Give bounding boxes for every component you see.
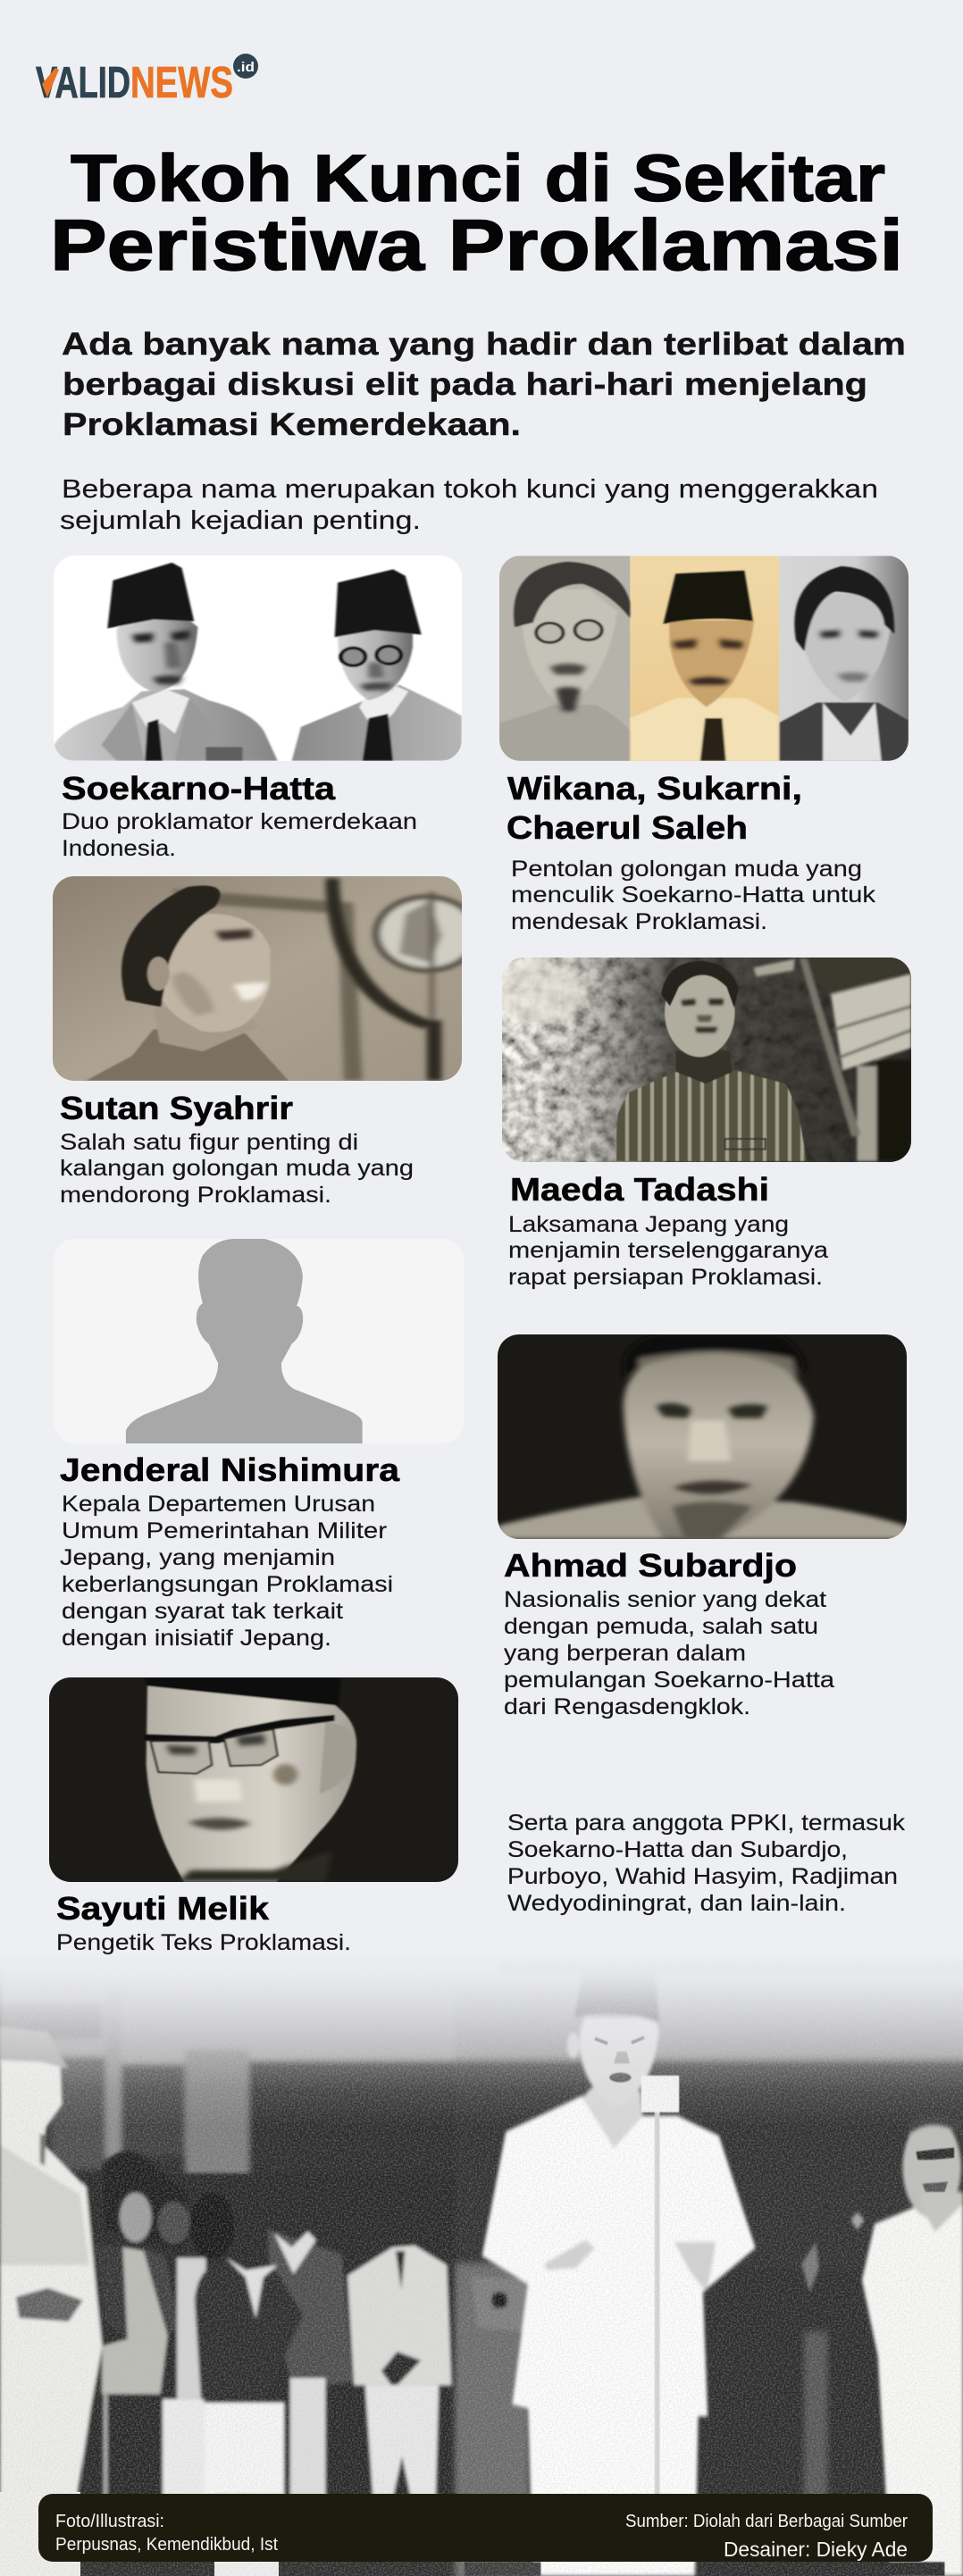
heading: Chaerul Saleh [507,809,748,846]
text block: mendesak Proklamasi. [511,909,767,934]
text block: Jepang, yang menjamin [60,1545,335,1570]
film grain [0,1956,963,2576]
heading: Maeda Tadashi [510,1171,769,1208]
heading: Jenderal Nishimura [60,1451,400,1488]
logo: Validnews.id: NEWS [130,59,233,107]
text block [508,1212,828,1290]
text block: PPKI members: Purboyo, Wahid Hasyim, Radjiman [507,1864,898,1889]
text block: Laksamana Jepang yang [508,1212,789,1237]
text block: menjamin terselenggaranya [508,1238,828,1263]
heading [507,770,802,846]
heading: Soekarno-Hatta [62,770,336,807]
photo placeholder: silhouette [126,1239,363,1443]
photo credit [55,2512,278,2555]
text block: dengan pemuda, salah satu [504,1614,818,1639]
logo: Validnews.id [36,54,258,107]
source and designer: Sumber: Diolah dari Berbagai Sumber [625,2512,908,2531]
photo credit: Perpusnas, Kemendikbud, Ist [55,2535,278,2555]
panel: Wikana, Sukarni, Chaerul Saleh [499,556,909,934]
text block: rapat persiapan Proklamasi. [508,1265,823,1290]
text block [511,857,876,934]
panel: Jenderal Nishimura [60,1239,400,1651]
panel: Soekarno-Hatta [54,556,462,861]
text block: keberlangsungan Proklamasi [62,1572,393,1597]
text block: yang berperan dalam [504,1641,746,1666]
text block [60,1492,393,1651]
photo: Sayuti Melik [49,1677,458,1882]
title: Tokoh Kunci di Sekitar [71,141,885,215]
heading: Ahmad Subardjo [504,1547,797,1584]
heading: Sayuti Melik [56,1890,270,1927]
photo: Maeda Tadashi [485,956,911,1162]
source and designer [625,2512,908,2561]
text block: kalangan golongan muda yang [60,1156,414,1181]
logo: Validnews.id: .id [237,60,255,75]
heading: Sutan Syahrir [60,1090,293,1126]
text block: Pengetik Teks Proklamasi. [56,1930,351,1955]
top fade [0,1955,963,2127]
intro text bold [62,327,906,442]
footer bar [38,2494,933,2562]
text block: PPKI members [507,1811,906,1916]
text block: Salah satu figur penting di [60,1130,358,1155]
intro text bold: Proklamasi Kemerdekaan. [63,407,521,442]
text block: PPKI members: Soekarno-Hatta dan Subardjo, [507,1837,848,1862]
title [50,141,903,286]
text block: PPKI members: Serta para anggota PPKI, termasuk [507,1811,906,1836]
intro text bold: berbagai diskusi elit pada hari-hari menjelang [63,367,867,402]
photo: three portraits [499,556,909,761]
text block: pemulangan Soekarno-Hatta [504,1668,834,1693]
text block [504,1587,834,1719]
text block: mendorong Proklamasi. [60,1183,331,1208]
photo: Ahmad Subardjo [498,1334,907,1539]
photo: proclamation reading [0,1955,963,2576]
text block [62,809,417,861]
intro text regular: sejumlah kejadian penting. [60,506,421,535]
logo: Validnews.id: VALID [36,59,130,107]
photo: Soekarno and Hatta [54,556,462,761]
photo credit: Foto/Illustrasi: [55,2512,164,2531]
text block: Pentolan golongan muda yang [511,857,862,882]
intro text regular [60,475,878,535]
text block: PPKI members: Wedyodiningrat, dan lain-lain. [507,1891,846,1916]
left part of crowd scene [0,1978,458,2494]
intro text regular: Beberapa nama merupakan tokoh kunci yang menggerakkan [62,475,878,504]
text block: Indonesia. [62,836,176,861]
text block: Kepala Departemen Urusan [62,1492,375,1517]
panel: Maeda Tadashi [485,956,911,1290]
text block: Duo proklamator kemerdekaan [62,809,417,834]
text block: dengan inisiatif Jepang. [62,1626,331,1651]
heading: Wikana, Sukarni, [507,770,802,807]
text block: dari Rengasdengklok. [504,1694,750,1719]
bottom strip below footer, left [0,2492,279,2576]
panel: Sutan Syahrir [53,876,477,1208]
text block [60,1130,414,1208]
text block: Umum Pemerintahan Militer [62,1518,387,1543]
source and designer: Desainer: Dieky Ade [724,2538,908,2561]
title: Peristiwa Proklamasi [50,205,903,286]
text block: dengan syarat tak terkait [62,1599,343,1624]
right part of scene: speaker and man on right [455,1971,963,2576]
text block: menculik Soekarno-Hatta untuk [511,882,876,907]
photo: Sutan Syahrir [53,876,477,1081]
panel: Ahmad Subardjo [498,1334,907,1719]
panel: Sayuti Melik [49,1677,458,1955]
text block: Nasionalis senior yang dekat [504,1587,826,1612]
intro text bold: Ada banyak nama yang hadir dan terlibat dalam [62,327,906,362]
